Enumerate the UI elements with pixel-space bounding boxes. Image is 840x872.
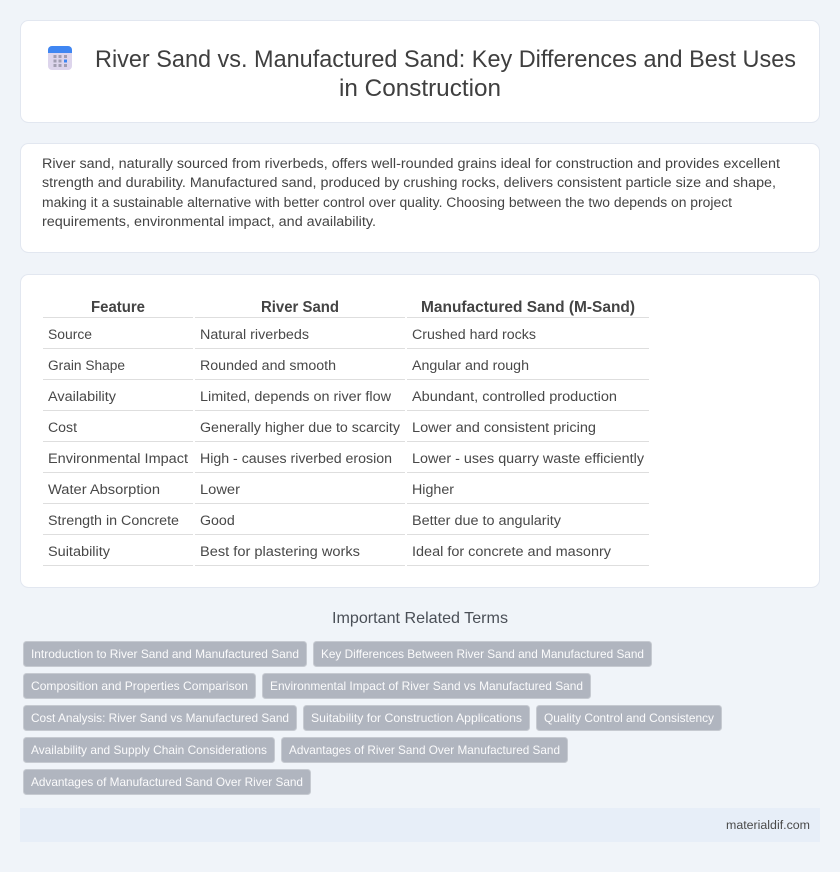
footer: materialdif.com — [726, 818, 810, 832]
table row: cost: Cost — [48, 420, 77, 436]
chip: Availability and Supply Chain Considerations — [31, 743, 267, 757]
table row: availability: Abundant, controlled production — [412, 389, 617, 405]
table row: water absorption: Water Absorption — [48, 482, 160, 498]
table row: suitability: Suitability — [48, 544, 111, 560]
chip — [24, 706, 296, 730]
table header — [91, 299, 635, 316]
panel: introduction text — [20, 144, 820, 252]
table header: Feature — [91, 299, 145, 316]
chip: Key Differences Between River Sand and Manufactured Sand — [321, 647, 644, 661]
chip — [304, 706, 530, 730]
table row: suitability: Ideal for concrete and masonry — [412, 544, 612, 560]
table row: strength in concrete: Good — [200, 513, 235, 529]
chip — [282, 738, 568, 762]
table row: availability — [48, 389, 617, 405]
table row: suitability — [48, 544, 612, 560]
title: River Sand vs. Manufactured Sand: Key Differences and Best Uses — [95, 46, 796, 73]
chip: Cost Analysis: River Sand vs Manufactured Sand — [31, 711, 289, 725]
panel: comparison table — [20, 274, 820, 588]
chip: Advantages of Manufactured Sand Over River Sand — [31, 775, 303, 789]
table row: source: Natural riverbeds — [200, 327, 309, 343]
chip — [262, 674, 590, 698]
heading: related terms: Important Related Terms — [332, 610, 508, 627]
table row: environmental impact: Environmental Impact — [48, 451, 188, 467]
table row: strength in concrete — [48, 513, 562, 529]
chip — [24, 738, 274, 762]
panel: introduction text: River sand, naturally sourced from riverbeds, offers well-rounded grains ideal for construction and provides excellent — [42, 156, 780, 172]
chip: Suitability for Construction Applications — [311, 711, 522, 725]
table row: suitability: Best for plastering works — [200, 544, 360, 560]
panel: introduction text: making it a sustainable alternative with better control over quality. Choosing between the two depends on project — [42, 195, 732, 211]
table row: environmental impact: Lower - uses quarry waste efficiently — [412, 451, 645, 467]
chip — [24, 642, 306, 666]
chip — [536, 706, 722, 730]
table row: grain shape: Rounded and smooth — [200, 358, 336, 374]
table row: cost: Generally higher due to scarcity — [200, 420, 401, 436]
table row: cost: Lower and consistent pricing — [412, 420, 596, 436]
panel: title header — [20, 20, 820, 122]
chip: Environmental Impact of River Sand vs Manufactured Sand — [270, 679, 583, 693]
table row: cost — [48, 420, 596, 436]
title: in Construction — [339, 75, 501, 102]
table row: strength in concrete: Better due to angularity — [412, 513, 562, 529]
chip — [24, 770, 310, 794]
table row: strength in concrete: Strength in Concrete — [48, 513, 179, 529]
table row: availability: Limited, depends on river flow — [200, 389, 392, 405]
table row: source — [48, 327, 536, 343]
table header: River Sand — [261, 299, 339, 316]
panel: introduction text: strength and durability. Manufactured sand, produced by crushing rocks, delivers consistent particle size and shape, — [42, 175, 776, 191]
chip: Composition and Properties Comparison — [31, 679, 248, 693]
table row: water absorption — [48, 482, 454, 498]
title — [95, 46, 796, 102]
table header: Manufactured Sand (M-Sand) — [421, 299, 635, 316]
table row: environmental impact — [48, 451, 645, 467]
table row: grain shape — [48, 358, 529, 374]
chip: Advantages of River Sand Over Manufactured Sand — [289, 743, 560, 757]
panel: introduction text: requirements, environmental impact, and availability. — [42, 214, 376, 230]
table row: source: Crushed hard rocks — [412, 327, 536, 343]
chip: Introduction to River Sand and Manufactured Sand — [31, 647, 299, 661]
table row: source: Source — [48, 327, 92, 343]
table row: environmental impact: High - causes riverbed erosion — [200, 451, 392, 467]
table row: availability: Availability — [48, 389, 117, 405]
related term chips — [24, 642, 722, 794]
table row: water absorption: Higher — [412, 482, 454, 498]
table row: water absorption: Lower — [200, 482, 240, 498]
chip: Quality Control and Consistency — [544, 711, 714, 725]
chip — [24, 674, 256, 698]
icon: calendar — [48, 46, 72, 70]
chip — [314, 642, 652, 666]
table row: grain shape: Grain Shape — [48, 358, 125, 374]
footer — [20, 808, 820, 842]
table row: grain shape: Angular and rough — [412, 358, 529, 374]
